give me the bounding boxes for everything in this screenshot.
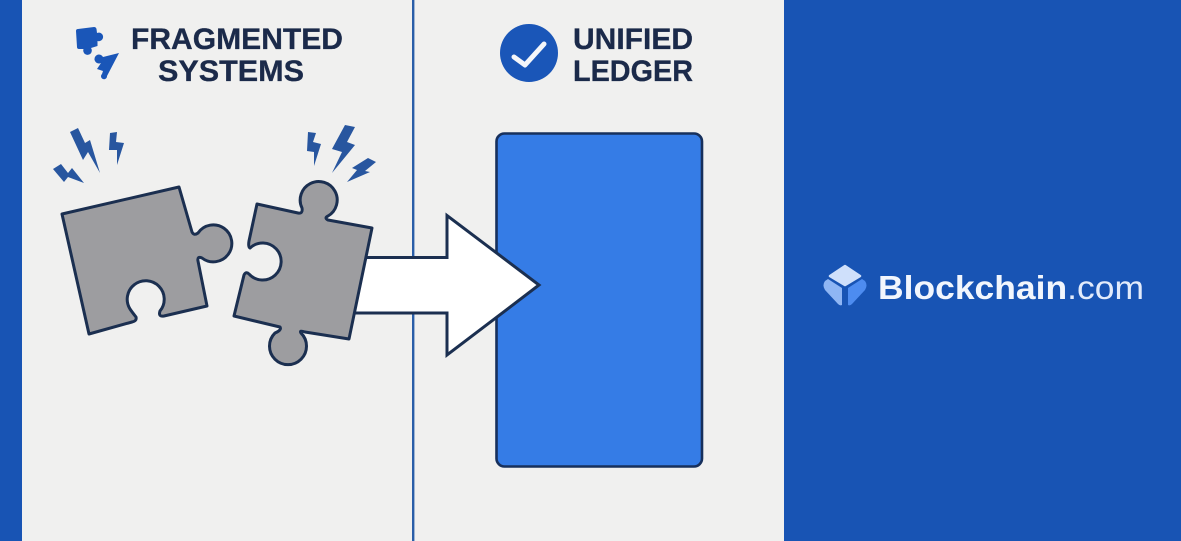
icon: small puzzle pieces — [76, 27, 119, 79]
heading: unified ledger: LEDGER — [573, 55, 693, 88]
heading: fragmented systems: FRAGMENTED — [131, 23, 343, 56]
arrow: fragmentation to unified ledger — [352, 216, 539, 355]
panel: comparison background — [22, 0, 784, 541]
ledger block — [496, 134, 702, 466]
icon: blockchain cube — [824, 266, 866, 305]
icon: check badge — [500, 24, 558, 82]
panel: fragmented systems — [53, 23, 539, 365]
heading: fragmented systems: SYSTEMS — [158, 55, 304, 88]
icon: left spark bolts — [53, 128, 124, 183]
icon: right spark bolts — [307, 125, 376, 182]
logo wordmark: Blockchain .com — [878, 270, 1144, 307]
logo: Blockchain.com — [824, 266, 1144, 307]
panel: unified ledger — [496, 23, 702, 466]
icon: left puzzle piece — [62, 187, 232, 334]
icon: right puzzle piece — [234, 182, 372, 365]
heading: unified ledger: UNIFIED — [573, 23, 693, 56]
